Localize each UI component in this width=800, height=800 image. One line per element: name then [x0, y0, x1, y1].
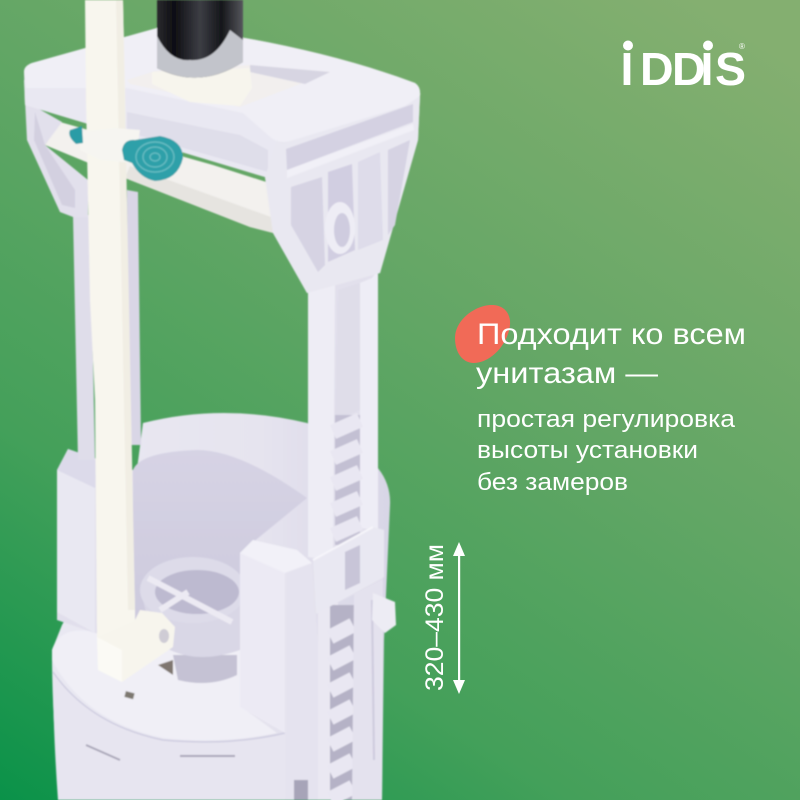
height label: 320–430 мм: [421, 544, 449, 691]
arrow: height range: [453, 542, 465, 694]
inner cavity: [133, 450, 307, 650]
product photo: cistern fill valve: [24, 0, 420, 800]
float cup: [140, 557, 246, 683]
right column with ladder: [308, 268, 383, 614]
headline: [476, 318, 746, 390]
body text: простая регулировка: [477, 406, 735, 433]
headline: унитазам —: [476, 357, 658, 390]
beam behind top frame: [45, 122, 285, 236]
body text: [477, 406, 735, 496]
inner opening: [127, 65, 330, 107]
accent blob: [455, 305, 510, 363]
right bracket: [265, 96, 420, 293]
right-of-rack rail: [127, 190, 141, 445]
axle: [80, 128, 140, 163]
clip on column: [313, 527, 396, 633]
top face: [24, 28, 420, 142]
chrome cylinder: [157, 0, 243, 78]
frame silhouette: [24, 28, 420, 293]
left column rail: [73, 215, 95, 460]
top frame: [24, 28, 420, 293]
valve collar: [152, 68, 252, 106]
logo: ®: [739, 42, 745, 51]
icon: teal knob: [69, 126, 183, 181]
central front block: [240, 540, 312, 733]
lower body cylinder: [52, 413, 390, 800]
height rack: [85, 0, 175, 682]
logo: IDDIS: [620, 43, 746, 95]
front wall: [24, 80, 280, 178]
headline: Подходит ко всем: [477, 318, 746, 351]
body text: высоты установки: [477, 437, 698, 464]
lower ladder track: [294, 575, 383, 800]
left rear block: [57, 449, 133, 640]
body text: без замеров: [477, 469, 628, 496]
left bracket: [25, 100, 88, 217]
